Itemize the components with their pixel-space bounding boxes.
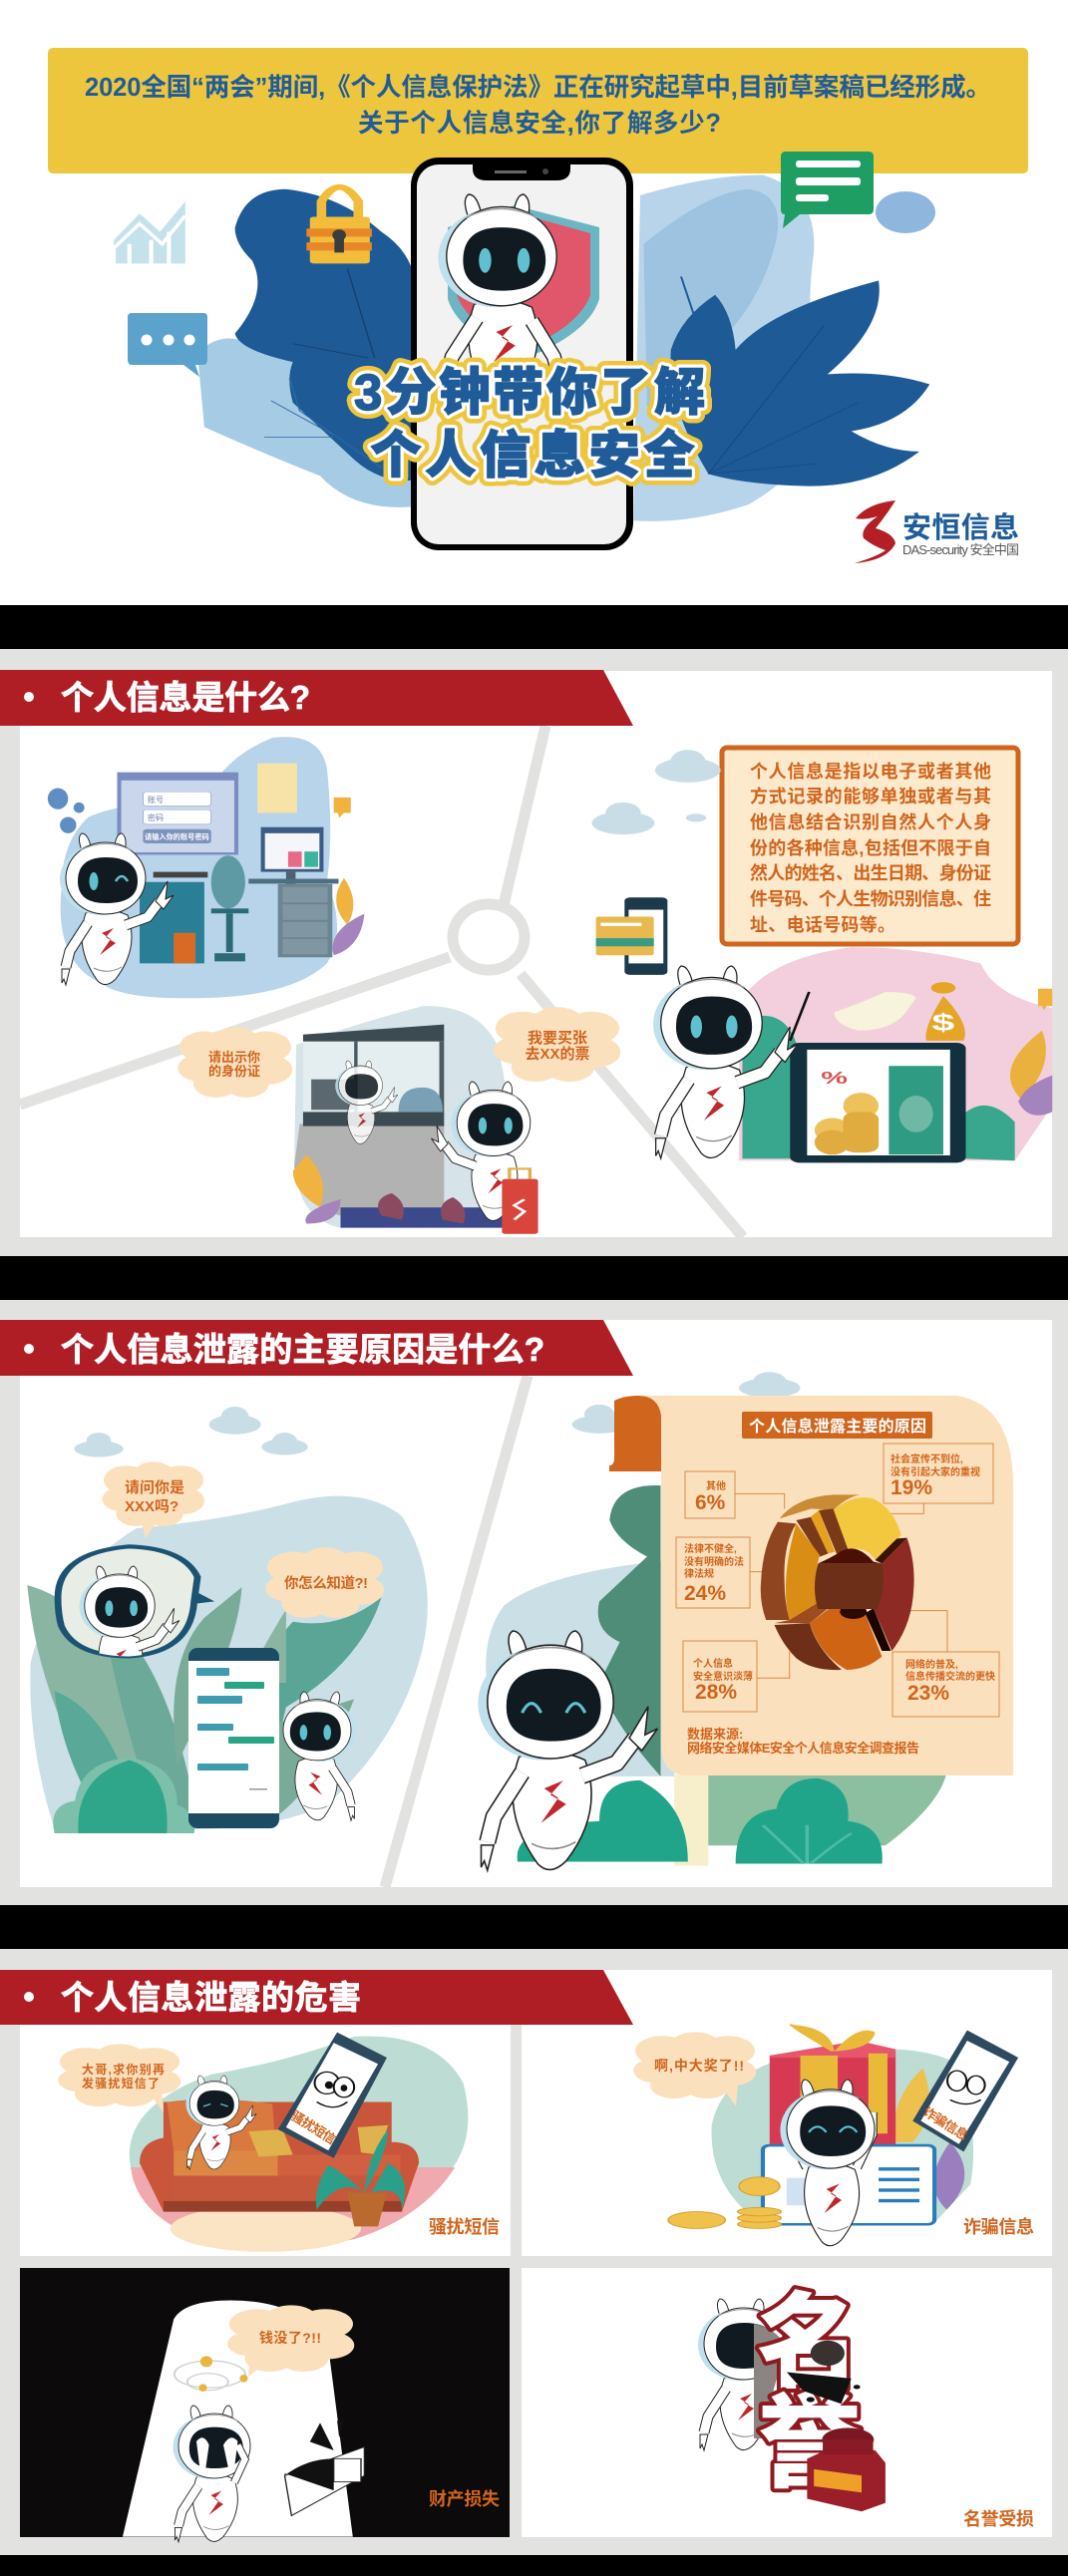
big character: 名誉: 名 — [757, 2286, 861, 2402]
money bag: $ — [932, 1009, 955, 1037]
login window — [117, 773, 238, 854]
harassing phone — [278, 2033, 387, 2158]
speech bubble: 钱没了: 钱没了?!! — [259, 2330, 321, 2346]
road lines and roundabout — [20, 726, 743, 1237]
robot beside phone — [283, 1692, 356, 1820]
phone text: 骚扰短信: 骚扰短信 — [288, 2108, 339, 2147]
scene: ticket counter — [293, 1006, 511, 1228]
panel: 财产损失 — [20, 2268, 510, 2542]
title: 3分钟带你了解 个人信息安全: 3分钟带你了解 — [354, 364, 705, 421]
small yellow bubble — [334, 798, 351, 817]
coins — [668, 2177, 781, 2229]
section banner — [0, 1320, 633, 1376]
callout: 个人信息安全意识淡薄 28% — [683, 1641, 757, 1712]
definition text box: 然人的姓名、出生日期、身份证 — [750, 862, 991, 883]
dizzy rings and stars — [175, 2356, 248, 2392]
phone chat window — [188, 1648, 279, 1828]
label: 诈骗信息: 诈骗信息 — [963, 2216, 1034, 2237]
callout: 网络的普及 23% — [892, 1652, 999, 1717]
robot on sofa — [185, 2076, 256, 2169]
callout: 网络的普及 23%: 信息传播交流的更快 — [905, 1670, 995, 1683]
icon: line chart — [114, 201, 185, 263]
speech bubble: 请问你是XXX吗: XXX吗? — [125, 1498, 178, 1515]
speech bubble: 啊,中大奖了: 啊,中大奖了!! — [654, 2058, 744, 2074]
callout: 其他 6%: 6% — [695, 1491, 726, 1514]
title: 3分钟带你了解 个人信息安全: 个人信息安全 — [371, 427, 694, 483]
callout: 法律不健全 24% — [676, 1537, 750, 1608]
big character: 名誉 — [757, 2286, 862, 2501]
scene: finance tablet — [596, 897, 1052, 1162]
speech bubble: 你怎么知道: 你怎么知道?! — [284, 1574, 368, 1592]
bird — [835, 992, 916, 1031]
small monitor — [248, 827, 338, 884]
pointer stick — [790, 992, 809, 1041]
section 2 panel: 个人信息泄露的主要原因 — [0, 1300, 1068, 1905]
icon: suitcase — [502, 1168, 538, 1234]
icon: blue chat bubble — [128, 313, 207, 377]
definition text box: 个人信息是指以电子或者其他 — [750, 761, 991, 782]
data source: 数据来源: — [687, 1727, 743, 1742]
note paper — [257, 764, 297, 812]
clouds — [74, 1372, 801, 1457]
speech bubble: 大哥,求你别再发骚扰短信了: 发骚扰短信了 — [82, 2076, 160, 2091]
definition text box: 份的各种信息,包括但不限于自 — [750, 837, 991, 858]
robot: pointing — [60, 833, 174, 985]
speech bubble: 请出示你的身份证: 请出示你 — [208, 1050, 260, 1065]
icon: padlock — [306, 187, 372, 263]
right scene foliage — [486, 1485, 946, 1866]
callout: 个人信息安全意识淡薄 28%: 安全意识淡薄 — [693, 1670, 753, 1683]
chart title: 个人信息泄露主要的原因 — [749, 1417, 926, 1436]
title: 3分钟带你了解 个人信息安全 — [354, 364, 705, 483]
speech bubble: 我要买张去XX的票: 去XX的票 — [525, 1045, 590, 1063]
callout: 个人信息安全意识淡薄 28%: 28% — [695, 1681, 737, 1704]
chair — [211, 855, 248, 961]
scroll panel — [609, 1396, 1013, 1775]
icon: green message bubble — [781, 152, 874, 228]
leaves — [336, 878, 353, 925]
speech bubble: 大哥,求你别再发骚扰短信了 — [58, 2044, 180, 2112]
section banner: 个人信息泄露的主要原因是什么? — [61, 1331, 544, 1368]
callout: 其他 6% — [685, 1471, 735, 1518]
robot video call bubble — [54, 1544, 214, 1659]
divider road — [385, 1376, 528, 1887]
title: 3分钟带你了解 个人信息安全: 个人信息安全 — [371, 427, 694, 483]
login form text: 密码 — [148, 812, 164, 822]
desk — [140, 882, 204, 963]
gears — [48, 789, 85, 833]
callout: 法律不健全 24%: 24% — [684, 1582, 726, 1605]
callout: 其他 6%: 其他 — [706, 1479, 726, 1492]
definition text box: 方式记录的能够单独或者与其 — [750, 786, 991, 806]
yellow headline banner: 关于个人信息安全,你了解多少? — [358, 110, 721, 138]
callout: 网络的普及 23%: 23% — [907, 1682, 949, 1705]
title: 3分钟带你了解 个人信息安全: 个人信息安全 — [371, 427, 694, 483]
panel: 诈骗信息 — [522, 1970, 1052, 2256]
callout: 社会宣传不到位 19% — [884, 1444, 993, 1503]
title: 3分钟带你了解 个人信息安全: 3分钟带你了解 — [354, 364, 705, 421]
data source — [687, 1727, 919, 1756]
tablet: % — [821, 1069, 848, 1088]
section banner — [0, 670, 633, 726]
cashier robot — [335, 1061, 398, 1143]
definition text box: 件号码、个人生物识别信息、住 — [750, 888, 991, 909]
section banner: 个人信息泄露的危害 — [61, 1979, 361, 2016]
phone — [912, 2030, 1018, 2151]
callout: 社会宣传不到位 19%: 19% — [890, 1476, 932, 1499]
ink bottle — [807, 2427, 886, 2511]
chart title — [742, 1412, 932, 1439]
definition text box: 址、电话号码等。 — [750, 914, 895, 935]
speech bubble: 请出示你的身份证 — [178, 1027, 292, 1098]
label: 财产损失: 财产损失 — [429, 2489, 500, 2509]
callout: 网络的普及 23%: 网络的普及, — [905, 1658, 958, 1671]
leaves — [1010, 1031, 1046, 1100]
callout: 法律不健全 24%: 没有明确的法 — [684, 1555, 744, 1568]
logo: DAS-security: 安恒信息 — [902, 511, 1019, 544]
logo: DAS-security — [855, 500, 1019, 563]
phone text: 诈骗信息: 诈骗信息 — [920, 2104, 971, 2143]
robot: presenter — [478, 1631, 657, 1870]
section 1 panel: 个人信息是什么 — [0, 649, 1068, 1256]
callout: 法律不健全 24%: 法律不健全, — [684, 1542, 737, 1555]
shield — [448, 205, 599, 359]
yellow headline banner — [48, 48, 1028, 173]
money bag — [925, 982, 965, 1041]
filing cabinet — [278, 884, 332, 957]
phone with robot — [411, 158, 633, 550]
tablet — [790, 1043, 965, 1162]
robot crying — [174, 2406, 250, 2542]
foliage background shapes — [197, 174, 929, 521]
potted plant — [316, 2129, 405, 2226]
login form text — [145, 796, 209, 841]
panel: 名誉受损 — [522, 2268, 1052, 2537]
speech bubble: 请出示你的身份证: 的身份证 — [208, 1064, 260, 1079]
callout: 个人信息安全意识淡薄 28%: 个人信息 — [693, 1657, 733, 1670]
speech bubble: 我要买张去XX的票: 我要买张 — [528, 1030, 587, 1047]
speech bubble: 大哥,求你别再发骚扰短信了: 大哥,求你别再 — [82, 2062, 165, 2077]
hero section — [0, 0, 1068, 605]
robot: teacher — [653, 966, 798, 1158]
login form text: 请输入你的账号密码 — [145, 832, 209, 841]
section banner — [0, 1970, 633, 2025]
yellow headline banner: 2020全国“两会”期间,《个人信息保护法》正在研究起草中,目前草案稿已经形成。 — [85, 74, 991, 102]
label: 名誉受损: 名誉受损 — [963, 2508, 1034, 2529]
decorative blue circle — [876, 191, 935, 233]
definition text box: 他信息结合识别自然人个人身 — [750, 811, 991, 832]
panel: 骚扰短信 — [20, 1970, 511, 2256]
title: 3分钟带你了解 个人信息安全: 3分钟带你了解 — [354, 364, 705, 421]
login form text: 账号 — [148, 796, 164, 805]
ink splash — [787, 2341, 861, 2404]
robot in shadow — [698, 2299, 786, 2450]
callout: 社会宣传不到位 19%: 没有引起大家的重视 — [890, 1465, 980, 1478]
clouds — [592, 750, 721, 834]
label: 骚扰短信: 骚扰短信 — [429, 2217, 500, 2237]
robot cheering — [780, 2080, 875, 2246]
speech bubble: 钱没了 — [227, 2305, 354, 2377]
info card — [763, 2145, 934, 2224]
speech bubble: 请问你是XXX吗: 请问你是 — [125, 1478, 184, 1496]
3D donut chart — [735, 1493, 947, 1678]
speech bubble: 你怎么知道 — [265, 1547, 384, 1618]
big character: 名誉: 誉 — [758, 2386, 862, 2501]
left scene foliage — [27, 1496, 428, 1833]
gift box — [770, 2024, 895, 2150]
callout: 社会宣传不到位 19%: 社会宣传不到位, — [890, 1452, 963, 1465]
robot: traveller — [431, 1082, 531, 1220]
definition text box — [722, 748, 1018, 944]
speech bubble: 我要买张去XX的票 — [494, 1007, 620, 1082]
speech bubble: 请问你是XXX吗 — [102, 1461, 204, 1538]
robot mascot — [439, 194, 564, 404]
logo: DAS-security: DAS-security 安全中国 — [902, 542, 1019, 557]
scene: robot logging in at desk — [48, 737, 364, 998]
phone and bank card — [596, 897, 667, 975]
wallet — [284, 2420, 364, 2515]
section banner: 个人信息是什么? — [61, 679, 310, 716]
callout: 法律不健全 24%: 律法规 — [684, 1567, 714, 1580]
data source: 网络安全媒体E安全个人信息安全调查报告 — [687, 1741, 919, 1756]
speech bubble: 啊,中大奖了 — [633, 2032, 756, 2106]
section 3 panel: 个人信息泄露的危害 — [0, 1949, 1068, 2555]
